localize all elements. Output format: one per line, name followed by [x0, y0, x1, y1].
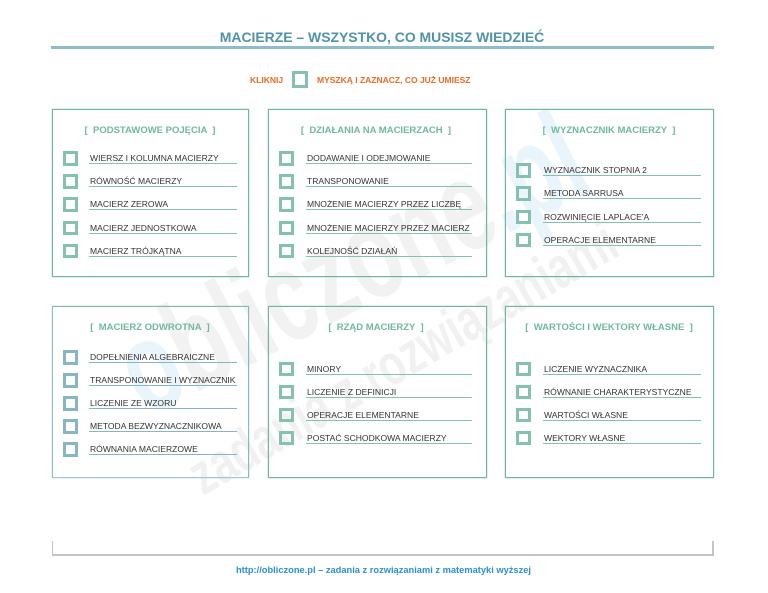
item: KOLEJNOŚĆ DZIAŁAŃ: [307, 246, 397, 256]
item: WYZNACZNIK STOPNIA 2: [544, 165, 647, 175]
item: RÓWNANIA MACIERZOWE: [90, 444, 198, 454]
panel: wartości i wektory własne: [505, 306, 714, 478]
item: [279, 174, 472, 189]
item: [63, 350, 237, 365]
item: [516, 408, 701, 422]
item: LICZENIE ZE WZORU: [90, 398, 176, 408]
item: [516, 163, 701, 178]
item: RÓWNANIE CHARAKTERYSTYCZNE: [544, 386, 692, 396]
item: [516, 186, 701, 201]
item: [63, 373, 237, 388]
item: MNOŻENIE MACIERZY PRZEZ LICZBĘ: [307, 199, 461, 209]
heading: [ PODSTAWOWE POJĘCIA ]: [85, 125, 215, 136]
item: LICZENIE WYZNACZNIKA: [544, 364, 647, 374]
item: DODAWANIE I ODEJMOWANIE: [307, 153, 430, 163]
item: RÓWNOŚĆ MACIERZY: [90, 176, 182, 186]
item: [516, 210, 701, 224]
item: [279, 431, 472, 445]
panel: rząd macierzy: [268, 306, 487, 478]
item: TRANSPONOWANIE: [307, 176, 389, 186]
panel: macierz odwrotna: [52, 306, 249, 478]
item: [279, 197, 472, 212]
item: [279, 244, 472, 258]
item: [516, 233, 701, 247]
item: [279, 362, 472, 376]
item: [63, 442, 237, 457]
item: [516, 362, 701, 376]
item: [63, 174, 237, 189]
legend: click instruction: [250, 71, 470, 88]
item: TRANSPONOWANIE I WYZNACZNIK: [90, 375, 235, 385]
icon: legend checkbox: [292, 71, 308, 88]
title rule: [51, 46, 714, 49]
footer link text: http://obliczone.pl – zadania z rozwiązaniami z matematyki wyższej: [236, 565, 531, 575]
item: [63, 151, 237, 166]
item: WARTOŚCI WŁASNE: [544, 410, 628, 420]
heading: [ DZIAŁANIA NA MACIERZACH ]: [301, 125, 451, 136]
title: MACIERZE – WSZYSTKO, CO MUSISZ WIEDZIEĆ: [220, 28, 544, 44]
item: MACIERZ ZEROWA: [90, 199, 168, 209]
panel: wyznacznik macierzy: [505, 109, 714, 277]
item: MINORY: [307, 364, 341, 374]
bottom bracket: [52, 541, 714, 556]
item: [279, 385, 472, 399]
item: METODA SARRUSA: [544, 188, 624, 198]
item: LICZENIE Z DEFINICJI: [307, 386, 396, 396]
item: [63, 419, 237, 434]
legend word: kliknij: KLIKNIJ: [250, 75, 283, 85]
item: OPERACJE ELEMENTARNE: [544, 234, 656, 244]
heading: [ RZĄD MACIERZY ]: [328, 322, 424, 333]
item: WIERSZ I KOLUMNA MACIERZY: [90, 153, 219, 163]
panel: podstawowe pojęcia: [52, 109, 249, 277]
heading: [ MACIERZ ODWROTNA ]: [90, 322, 210, 333]
watermark: obliczone.pl zadania z rozwiązaniami: obliczone.pl: [92, 84, 609, 443]
item: WEKTORY WŁASNE: [544, 432, 625, 442]
item: [279, 221, 472, 235]
item: DOPEŁNIENIA ALGEBRAICZNE: [90, 352, 215, 362]
legend text: MYSZKĄ I ZAZNACZ, CO JUŻ UMIESZ: [317, 75, 470, 85]
heading: [ WARTOŚCI I WEKTORY WŁASNE ]: [525, 322, 693, 333]
item: [516, 431, 701, 445]
item: [279, 408, 472, 422]
item: [279, 151, 472, 166]
heading: [ WYZNACZNIK MACIERZY ]: [543, 125, 675, 136]
item: POSTAĆ SCHODKOWA MACIERZY: [307, 432, 447, 442]
item: [63, 244, 237, 258]
item: OPERACJE ELEMENTARNE: [307, 410, 419, 420]
item: METODA BEZWYZNACZNIKOWA: [90, 421, 222, 431]
item: MACIERZ TRÓJKĄTNA: [90, 246, 182, 256]
item: MNOŻENIE MACIERZY PRZEZ MACIERZ: [307, 222, 470, 232]
panel: działania na macierzach: [268, 109, 487, 277]
item: [63, 221, 237, 235]
item: [63, 197, 237, 212]
item: [63, 396, 237, 411]
item: [516, 385, 701, 399]
item: MACIERZ JEDNOSTKOWA: [90, 222, 197, 232]
item: ROZWINIĘCIE LAPLACE'A: [544, 212, 649, 222]
